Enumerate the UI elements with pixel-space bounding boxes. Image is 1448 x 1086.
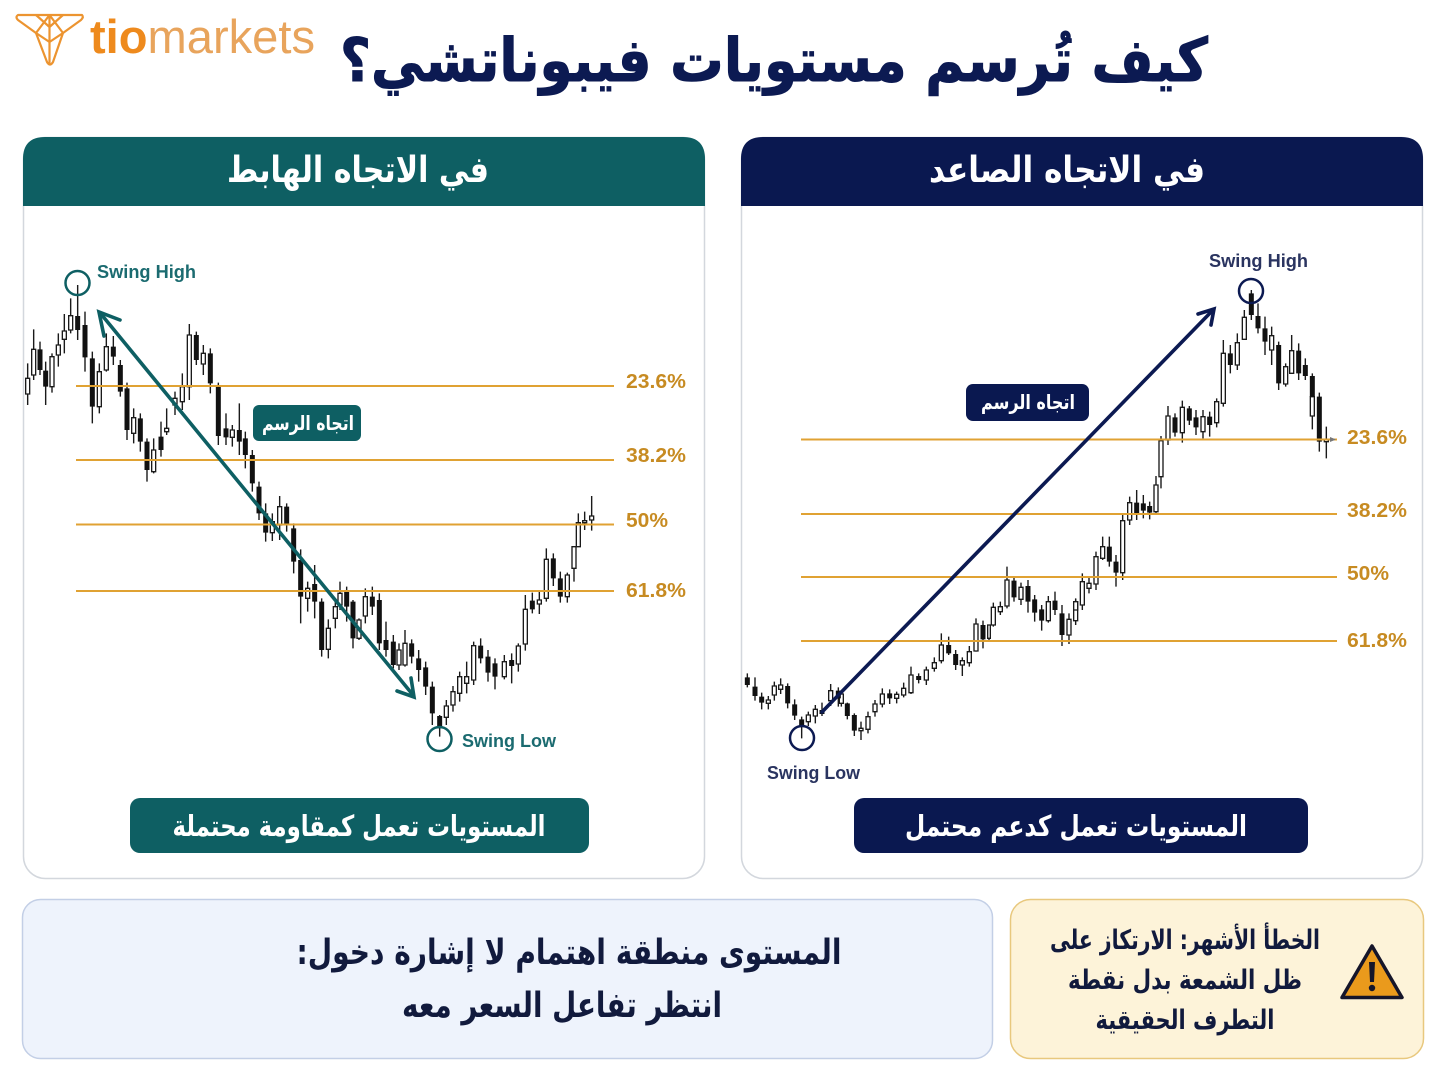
fibonacci levels: downtrend: 38.2%	[626, 445, 686, 467]
swing low marker: left: Swing Low	[462, 731, 557, 751]
fibonacci levels: downtrend: 50%	[626, 510, 668, 532]
swing high marker: left	[66, 262, 196, 295]
takeaway line 2: انتظر تفاعل السعر معه	[402, 986, 722, 1026]
callout: support: المستويات تعمل كدعم محتمل	[905, 809, 1247, 843]
fibonacci levels: downtrend: 23.6%	[626, 371, 686, 393]
swing low marker: right: Swing Low	[767, 763, 861, 783]
mistake text	[1050, 922, 1320, 1036]
swing low marker: left	[428, 727, 557, 751]
panel frame	[742, 138, 1422, 878]
label: drawing direction: اتجاه الرسم	[981, 390, 1075, 414]
label: drawing direction	[253, 405, 361, 441]
mistake text: ظل الشمعة بدل نقطة	[1068, 965, 1302, 996]
panel: key takeaway	[22, 900, 992, 1058]
fibonacci levels: uptrend: 50%	[1347, 563, 1389, 585]
swing low marker: right	[767, 726, 861, 783]
panel header: في الاتجاه الصاعد	[929, 150, 1205, 191]
fibonacci levels: downtrend: 61.8%	[626, 580, 686, 602]
panel: common mistake	[1010, 900, 1424, 1058]
fibonacci levels: uptrend	[801, 427, 1407, 652]
logo: tiomarkets	[16, 10, 315, 65]
panel frame	[24, 138, 704, 878]
panel header	[23, 137, 705, 206]
icon: warning triangle	[1342, 946, 1402, 998]
fibonacci levels: uptrend: 38.2%	[1347, 500, 1407, 522]
candlestick chart: downtrend	[26, 285, 594, 737]
panel header: في الاتجاه الهابط	[227, 150, 489, 191]
label: drawing direction	[966, 384, 1089, 421]
icon: logo mark	[16, 15, 83, 65]
arrow: drawing direction down	[99, 312, 414, 697]
swing high marker: right: Swing High	[1209, 251, 1308, 271]
fibonacci levels: uptrend: 61.8%	[1347, 630, 1407, 652]
takeaway line 1: المستوى منطقة اهتمام لا إشارة دخول:	[296, 933, 842, 973]
callout: support	[854, 798, 1308, 853]
mistake text: الخطأ الأشهر: الارتكاز على	[1050, 922, 1320, 956]
swing high marker: right	[1209, 251, 1308, 303]
arrow: drawing direction up	[822, 309, 1214, 712]
label: drawing direction: اتجاه الرسم	[262, 411, 354, 435]
panel header	[741, 137, 1423, 206]
candlestick chart: uptrend	[747, 290, 1328, 740]
callout: resistance	[130, 798, 589, 853]
swing high marker: left: Swing High	[97, 262, 196, 282]
panel: uptrend	[741, 137, 1423, 878]
mistake text: التطرف الحقيقية	[1096, 1005, 1274, 1036]
panel: downtrend	[23, 137, 705, 878]
fibonacci levels: uptrend: 23.6%	[1347, 427, 1407, 449]
callout: resistance: المستويات تعمل كمقاومة محتملة	[172, 809, 546, 843]
title: كيف تُرسم مستويات فيبوناتشي؟	[340, 26, 1208, 96]
fibonacci levels: downtrend	[76, 371, 686, 602]
wordmark: tiomarkets	[90, 10, 315, 63]
